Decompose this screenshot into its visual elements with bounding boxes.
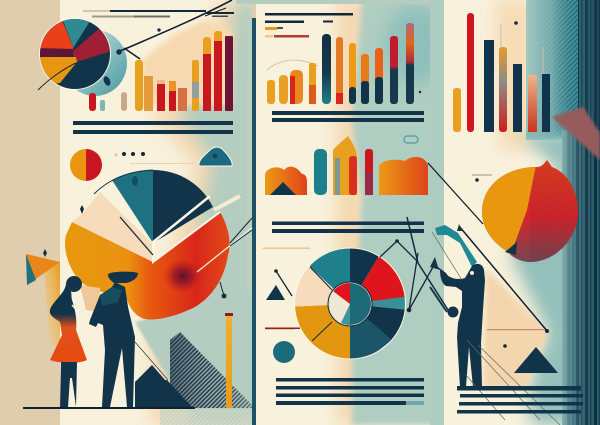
icon: teal blob <box>199 147 232 166</box>
figure: woman <box>50 276 108 407</box>
bottom rules, right <box>457 386 583 414</box>
orange blob <box>333 136 357 195</box>
legs <box>60 362 77 407</box>
small teardrop <box>102 75 112 87</box>
orange and red slice <box>65 212 230 320</box>
double rules, centre lower <box>272 222 424 233</box>
hat <box>108 272 138 283</box>
head <box>66 276 82 292</box>
neck highlight <box>470 271 474 275</box>
pie outline <box>39 18 111 90</box>
dark hot spot <box>163 258 203 294</box>
body <box>89 282 135 407</box>
pointer tip <box>457 224 462 231</box>
zigzag pointer lines <box>380 217 450 313</box>
teal scarf <box>435 225 477 267</box>
left triangle with orange fade <box>26 249 60 345</box>
body <box>430 257 485 387</box>
panel: centre column background <box>256 4 430 425</box>
small dot <box>503 344 507 348</box>
double rules, left column <box>73 121 233 134</box>
orange block <box>379 157 428 195</box>
small triangle with pointer <box>266 269 292 300</box>
orange vertical bar <box>225 313 233 408</box>
icon: teal pill <box>404 136 418 143</box>
peach slice <box>72 192 153 262</box>
teal slice <box>112 170 153 243</box>
cream slice <box>100 180 152 243</box>
long black diagonal lines <box>428 163 548 332</box>
cream edge above red <box>153 212 220 262</box>
figure: person with pointer <box>430 224 485 387</box>
pie chart: top left <box>35 18 127 96</box>
bar chart: left column <box>89 31 233 111</box>
pie slices <box>40 19 110 89</box>
dark mountain <box>135 365 193 408</box>
red bar <box>349 156 357 195</box>
tan rule <box>487 329 545 330</box>
vertical divider <box>252 18 256 425</box>
small orange and red circle <box>70 149 102 181</box>
navy slice <box>153 170 213 243</box>
drop on teal slice <box>132 176 138 186</box>
drop pin <box>80 205 84 214</box>
divider lines <box>310 267 332 341</box>
navy wedge <box>505 242 517 255</box>
sage strip at right edge of centre column <box>430 0 444 425</box>
hand lines <box>430 287 447 312</box>
black diagonal <box>120 217 153 255</box>
teal shadow blob <box>63 30 127 96</box>
pie chart: right <box>482 160 578 262</box>
peach rule <box>263 248 310 249</box>
pie chart: centre <box>294 248 406 360</box>
peach patch behind figures <box>80 285 100 312</box>
curved line across pie <box>38 63 76 90</box>
bar chart: centre column <box>267 23 421 104</box>
navy triangle <box>270 182 296 195</box>
figure: man <box>89 272 138 407</box>
teal bar <box>314 149 327 195</box>
pin under large pie <box>220 282 226 298</box>
hub ring <box>328 282 372 326</box>
cream stick pointer <box>197 196 252 272</box>
pie fill <box>482 160 578 262</box>
crimson bar <box>365 149 373 195</box>
teal circle <box>273 341 295 363</box>
hand circle <box>448 306 458 318</box>
long pointer stroke, top left <box>116 0 232 59</box>
panel: right column background <box>444 0 600 425</box>
panel: left column background <box>60 0 260 425</box>
diagonal thin line <box>135 342 168 380</box>
bottom rules, centre <box>276 378 424 405</box>
ground line <box>23 407 195 409</box>
bar chart: right column <box>453 13 550 132</box>
white divider <box>152 196 210 243</box>
arc annotation <box>267 60 318 70</box>
double rules, centre upper <box>272 111 424 122</box>
hatched tower <box>170 332 252 408</box>
upper body and dress <box>50 284 87 363</box>
navy triangle <box>514 347 558 373</box>
red rule <box>265 328 300 330</box>
hub slices <box>329 283 371 325</box>
teal fade bar <box>335 158 340 195</box>
orange and red mountain <box>265 167 307 195</box>
dots and rule, right column <box>472 21 518 182</box>
end dot on diagonal <box>545 329 549 333</box>
area chart: centre lower <box>265 136 428 195</box>
centre top rules <box>265 13 353 38</box>
chest highlight <box>100 287 122 306</box>
top rules, left column <box>83 10 234 18</box>
outer arc line <box>94 170 153 194</box>
thin rule under dots <box>130 163 195 164</box>
thin diagonal rays <box>432 232 560 425</box>
dots row <box>114 152 145 156</box>
top band above centre column <box>236 0 444 4</box>
pointer stick <box>72 305 108 346</box>
large pie chart <box>65 170 230 320</box>
